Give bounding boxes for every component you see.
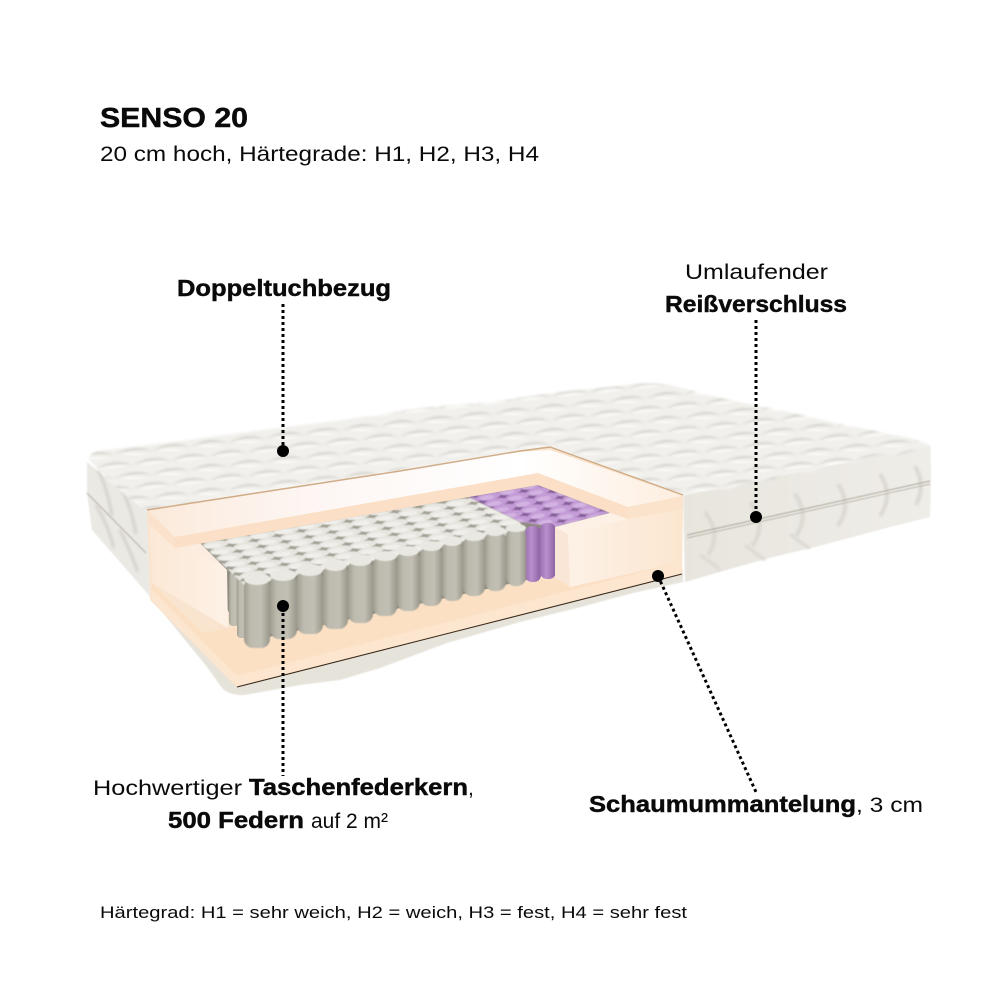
label: Hochwertiger Taschenfederkern, 500 Federn auf 2 m²: auf 2 m² (311, 810, 388, 833)
title: SENSO 20 (100, 102, 248, 133)
leader: Taschenfederkern (277, 600, 289, 776)
label: Hochwertiger Taschenfederkern, 500 Federn auf 2 m²: 500 Federn (168, 807, 304, 833)
purple pocket springs top (468, 485, 610, 527)
leader: Reißverschluss (750, 320, 762, 523)
foam base slab front lighter band (152, 562, 682, 687)
left foam block (150, 523, 228, 628)
foam base slab (152, 555, 682, 687)
label: Umlaufender Reißverschluss: Reißverschluss (665, 291, 847, 317)
grey side columns (229, 572, 247, 638)
subtitle: 20 cm hoch, Härtegrade: H1, H2, H3, H4 (100, 143, 539, 166)
footnote: Härtegrad: H1 = sehr weich, H2 = weich, H3 = fest, H4 = sehr fest (100, 903, 687, 922)
label: Umlaufender Reißverschluss (665, 261, 847, 317)
purple pocket springs front (525, 523, 556, 582)
cut-out section (147, 447, 683, 687)
leader: Doppeltuchbezug (277, 304, 289, 457)
cut-out backing (147, 447, 683, 687)
cover: right side panel with zipper (683, 445, 931, 582)
top foam slab (148, 450, 683, 548)
springs back shade (200, 485, 610, 640)
label: Umlaufender Reißverschluss: Umlaufender (685, 261, 828, 284)
right foam block (555, 509, 683, 587)
cover: left side panel (87, 462, 150, 597)
label: Hochwertiger Taschenfederkern, 500 Federn auf 2 m² (93, 774, 474, 833)
label: Schaumummantelung, 3 cm: Schaumummantelung (589, 791, 856, 817)
grey pocket springs top (200, 497, 525, 586)
leader: Schaumummantelung (652, 570, 756, 792)
bottom cut line (237, 574, 682, 687)
cover: quilted top surface (88, 383, 930, 511)
label: Schaumummantelung, 3 cm: , 3 cm (856, 794, 923, 817)
label: Hochwertiger Taschenfederkern, 500 Federn auf 2 m²: , (468, 777, 474, 800)
bottom sheet of the cover (147, 570, 683, 695)
label: Hochwertiger Taschenfederkern, 500 Federn auf 2 m²: Hochwertiger (93, 777, 242, 800)
label: Doppeltuchbezug: Doppeltuchbezug (177, 275, 391, 301)
grey pocket spring columns (244, 524, 526, 648)
mattress illustration (87, 383, 931, 695)
label: Hochwertiger Taschenfederkern, 500 Federn auf 2 m²: Taschenfederkern (249, 774, 468, 800)
cover thickness edge (147, 447, 683, 510)
